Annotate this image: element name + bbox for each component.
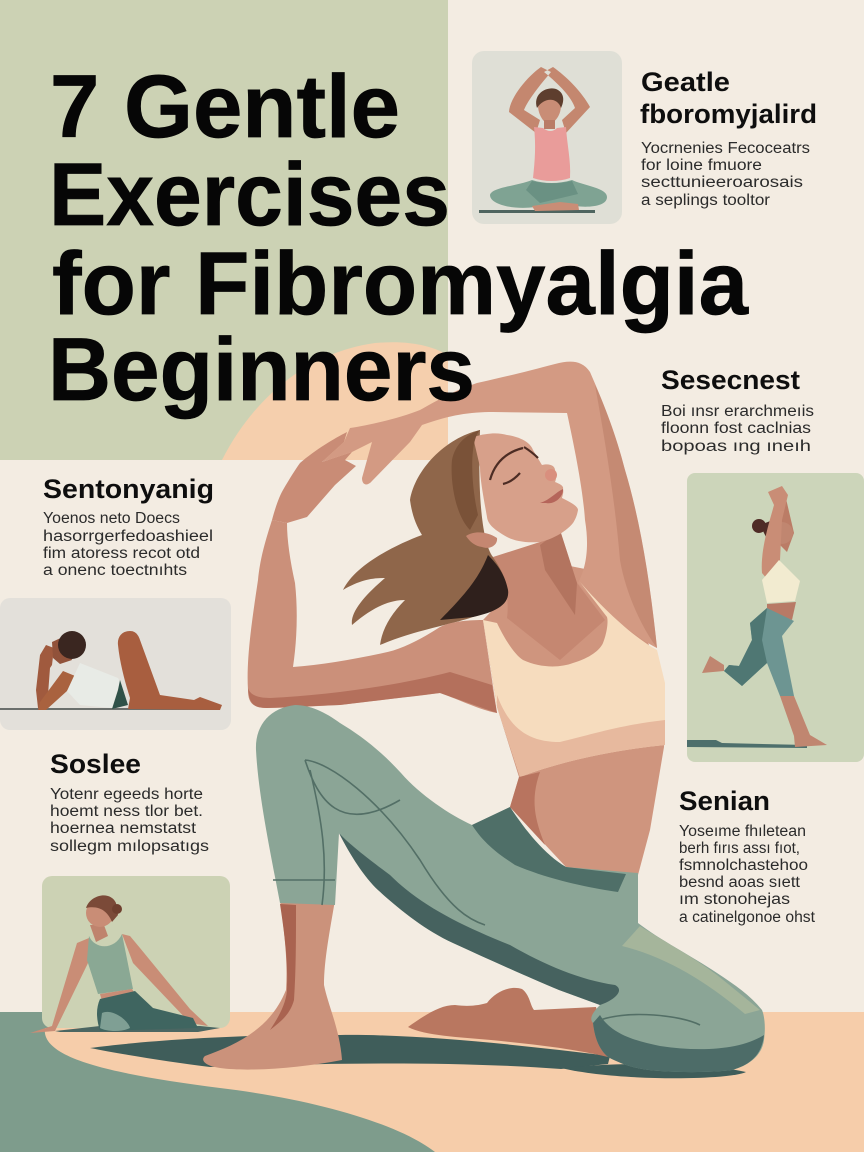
shirt: [67, 663, 120, 708]
text block: lower left: Yotenr egeeds horte: [50, 786, 203, 803]
leggings: [724, 608, 794, 696]
raised arms: [509, 67, 590, 133]
ground line: [0, 708, 220, 710]
ground shadow: [687, 740, 807, 748]
text block: upper right: Boi ınsr erarchmeıis: [661, 403, 814, 420]
shorts: [112, 680, 128, 709]
lower hand: [272, 432, 356, 523]
text block: lower left: hoernea nemstatst: [50, 820, 197, 837]
leggings: [256, 705, 765, 1072]
peach sun shape: [222, 342, 448, 460]
text block: lower right: [679, 786, 816, 926]
white top: [762, 560, 800, 603]
text block: left: [43, 474, 214, 579]
main figure: [203, 362, 765, 1072]
floor: [0, 1012, 864, 1152]
midriff shading: [510, 772, 545, 845]
left arm: [30, 938, 89, 1033]
crop top: [483, 582, 665, 777]
head: [538, 98, 561, 124]
text block: gentle stretch: a seplings tooltor: [641, 192, 770, 209]
forearm and hand: [36, 645, 54, 708]
back arm: [780, 490, 794, 552]
midriff: [100, 989, 134, 1001]
text block: lower right: ım stonohejas: [679, 891, 790, 908]
hair dark underside: [440, 555, 508, 620]
sage top: [87, 934, 133, 994]
leggings seams: [273, 760, 700, 1025]
thigh highlight: [622, 926, 760, 1014]
head and neck: [90, 925, 108, 942]
raised back foot: [702, 656, 724, 673]
midriff: [767, 602, 796, 620]
text block: left: fim atoress recot otd: [43, 545, 200, 562]
title: Beginners: [48, 319, 475, 419]
neck: [493, 530, 605, 660]
text block: lower right: berh fırıs assı fıot,: [679, 840, 800, 857]
text block: gentle stretch: for loine fmuore: [641, 157, 762, 174]
pink top: [533, 127, 570, 181]
title: 7 Gentle: [50, 56, 400, 156]
front arm: [762, 486, 788, 585]
text block: lower right: Yoseıme fhıletean: [679, 823, 806, 840]
bent arm: [248, 520, 497, 713]
face: [473, 433, 578, 542]
panel: reclining stretch illustration: [0, 598, 231, 730]
text block: lower left: sollegm mılopsatıgs: [50, 838, 209, 855]
text block: upper right: floonn fost caclnias: [661, 420, 811, 437]
knee shadow: [593, 1015, 764, 1072]
text block: lower right: Senian: [679, 786, 770, 816]
text block: gentle stretch: Geatle: [641, 67, 730, 97]
text block: lower right: besnd aoas sıett: [679, 874, 801, 891]
text block: left: a onenc toectnıhts: [43, 562, 187, 579]
panel: standing lunge illustration: [687, 473, 864, 762]
text block: lower left: Soslee: [50, 749, 141, 779]
title: for Fibromyalgia: [52, 233, 749, 333]
green title panel: [0, 0, 448, 460]
raised arm shadow: [595, 385, 657, 648]
feet: [532, 202, 579, 211]
head: [52, 636, 72, 664]
text block: gentle stretch: fboromyjalird: [640, 99, 817, 129]
panel: seated stretch illustration: [472, 51, 622, 224]
crop top shading: [497, 695, 665, 777]
leggings underside shadow: [339, 833, 619, 1005]
text block: lower right: fsmnolchastehoo: [679, 857, 808, 874]
text block: gentle stretch: [640, 67, 817, 209]
title: Exercises: [49, 144, 450, 244]
ear: [466, 532, 497, 548]
upper arm: [38, 671, 80, 710]
back foot: [408, 988, 608, 1057]
text block: upper right: Sesecnest: [661, 365, 800, 395]
text block: lower right: a catinelgonoe ohst: [679, 909, 816, 926]
text block: gentle stretch: Yocrnenies Fecoceatrs: [641, 140, 810, 157]
leg: [118, 631, 222, 710]
bent arm shadow: [248, 672, 497, 713]
lower leg and foot: [780, 696, 827, 747]
text block: gentle stretch: secttunieeroarosais: [641, 174, 803, 191]
text block: left: Yoenos neto Doecs: [43, 510, 180, 527]
right arm: [122, 934, 208, 1026]
ground shadow: [479, 210, 595, 213]
head: [771, 522, 793, 544]
text block: upper right: [661, 365, 814, 455]
title: [48, 56, 749, 419]
torso skin: [483, 560, 665, 875]
text block: left: Sentonyanig: [43, 474, 214, 504]
crossed legs: [490, 180, 607, 208]
text block: lower left: [50, 749, 209, 855]
hair back: [343, 430, 508, 645]
leggings: [97, 991, 198, 1031]
text block: lower left: hoemt ness tlor bet.: [50, 803, 203, 820]
facial features: [490, 447, 563, 503]
lower leg shadow: [270, 904, 296, 1030]
lower front leg and foot: [203, 900, 342, 1070]
raised arm: [322, 362, 657, 648]
waistband: [472, 807, 626, 892]
text block: upper right: bopoas ıng ıneıh: [661, 438, 811, 455]
panel: seated twist illustration: [30, 876, 230, 1033]
text block: left: hasorrgerfedoashieel: [43, 528, 213, 545]
hair front strands: [452, 430, 480, 530]
ground shadow: [55, 1026, 220, 1032]
